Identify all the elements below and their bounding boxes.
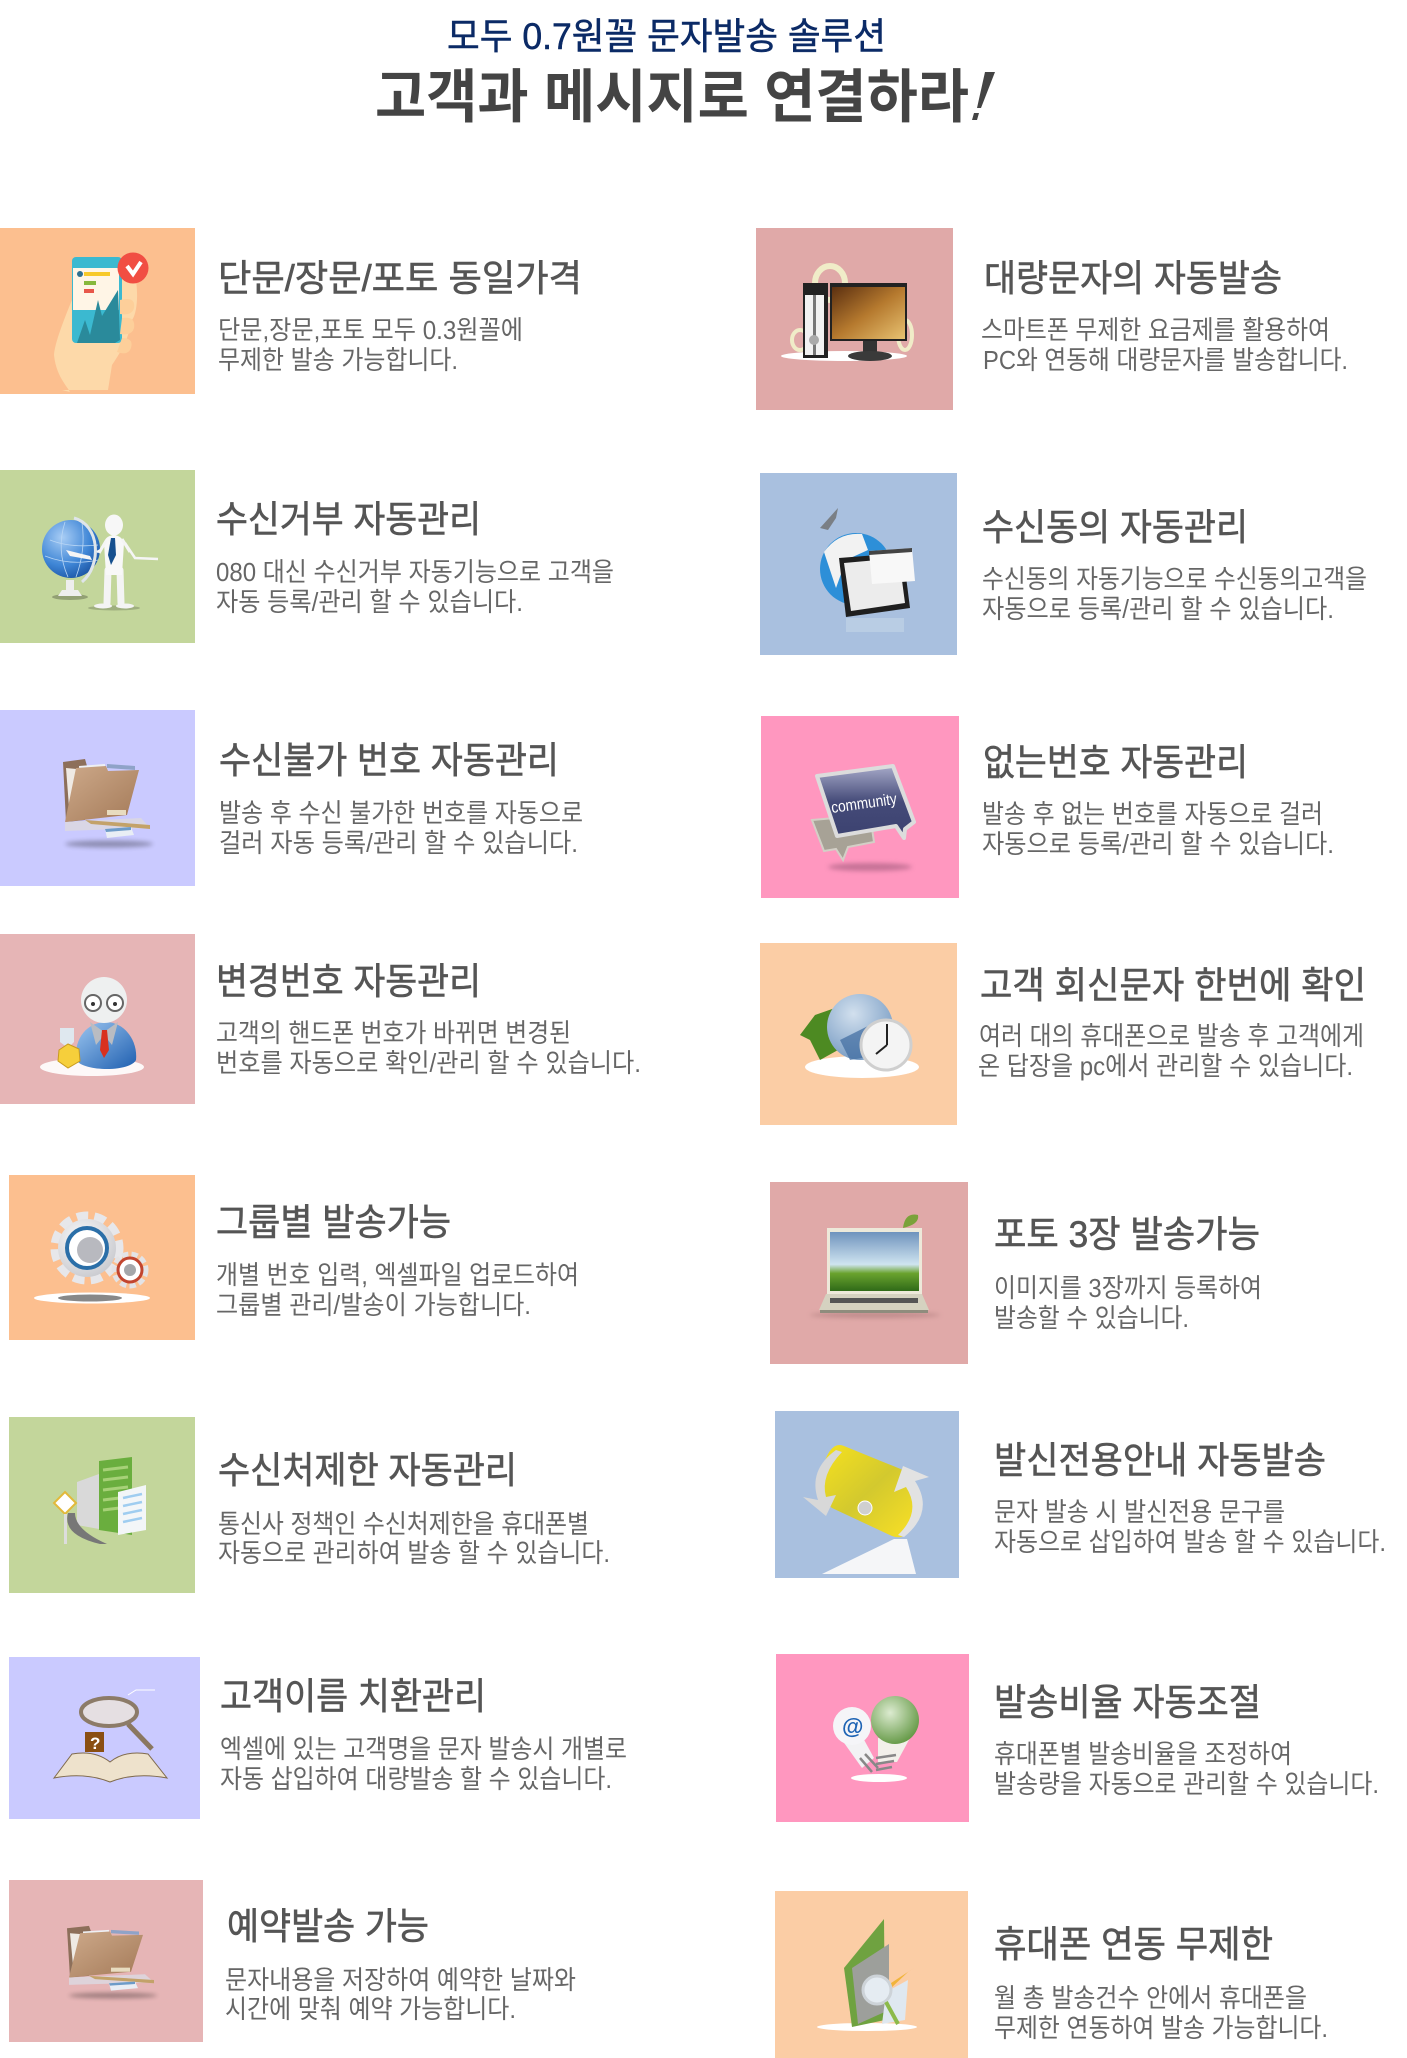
description: 시간에 맞춰 예약 가능합니다. <box>225 1994 516 2024</box>
description: 발송 후 없는 번호를 자동으로 걸러 <box>982 799 1323 829</box>
icon: community speech bubbles <box>812 766 914 871</box>
description <box>982 564 1367 624</box>
panel: 그룹별 발송가능 <box>9 1175 579 1340</box>
panel: 없는번호 자동관리 <box>761 716 1334 898</box>
description <box>216 1018 641 1078</box>
icon: folder <box>67 1926 157 1998</box>
description: 자동 삽입하여 대량발송 할 수 있습니다. <box>220 1764 612 1794</box>
description: 여러 대의 휴대폰으로 발송 후 고객에게 <box>979 1021 1364 1051</box>
description: 엑셀에 있는 고객명을 문자 발송시 개별로 <box>220 1734 627 1764</box>
description <box>225 1965 576 2024</box>
panel: 예약발송 가능 <box>9 1880 576 2042</box>
heading: 포토 3장 발송가능 <box>994 1214 1260 1255</box>
description <box>218 315 523 375</box>
description <box>219 798 583 858</box>
description: 개별 번호 입력, 엑셀파일 업로드하여 <box>216 1260 579 1290</box>
icon: hand holding phone <box>54 252 148 392</box>
description <box>216 1260 579 1320</box>
panel: 고객이름 치환관리 <box>9 1657 627 1819</box>
description: 문자내용을 저장하여 예약한 날짜와 <box>225 1965 576 1995</box>
description: 자동 등록/관리 할 수 있습니다. <box>216 587 523 617</box>
description: 걸러 자동 등록/관리 할 수 있습니다. <box>219 828 578 858</box>
description: 이미지를 3장까지 등록하여 <box>994 1273 1262 1303</box>
icon: folder <box>63 759 153 848</box>
description: 고객의 핸드폰 번호가 바뀌면 변경된 <box>216 1018 571 1048</box>
panel: 수신거부 자동관리 <box>0 470 614 643</box>
panel: 단문/장문/포토 동일가격 <box>0 228 582 394</box>
description <box>216 557 614 617</box>
panel: 대량문자의 자동발송 <box>756 228 1348 410</box>
description <box>220 1734 627 1794</box>
heading: 수신처제한 자동관리 <box>218 1450 517 1491</box>
icon: gears <box>34 1217 150 1304</box>
description <box>981 315 1348 375</box>
description: 단문,장문,포토 모두 0.3원꼴에 <box>218 315 523 345</box>
panel: 고객 회신문자 한번에 확인 <box>760 943 1366 1125</box>
description: 무제한 발송 가능합니다. <box>218 345 458 375</box>
description: 발송량을 자동으로 관리할 수 있습니다. <box>994 1769 1379 1799</box>
heading: 고객이름 치환관리 <box>220 1676 486 1717</box>
description <box>982 799 1334 859</box>
description <box>994 1983 1328 2043</box>
panel: 포토 3장 발송가능 <box>770 1182 1262 1364</box>
description: 온 답장을 pc에서 관리할 수 있습니다. <box>978 1051 1353 1081</box>
icon: person with globe <box>42 514 158 610</box>
heading: 수신거부 자동관리 <box>216 499 481 540</box>
icon: light bulbs <box>833 1696 919 1782</box>
description: 문자 발송 시 발신전용 문구를 <box>994 1497 1285 1527</box>
description <box>978 1021 1364 1081</box>
heading: 단문/장문/포토 동일가격 <box>218 258 582 299</box>
icon: buildings and road sign <box>54 1457 146 1544</box>
heading: 발송비율 자동조절 <box>994 1682 1261 1723</box>
description: 발송할 수 있습니다. <box>994 1303 1189 1333</box>
heading: 예약발송 가능 <box>227 1906 429 1947</box>
description: 스마트폰 무제한 요금제를 활용하여 <box>981 315 1330 345</box>
panel: 변경번호 자동관리 <box>0 934 641 1104</box>
heading: 휴대폰 연동 무제한 <box>994 1924 1273 1965</box>
heading: 발신전용안내 자동발송 <box>994 1440 1326 1481</box>
description: 휴대폰별 발송비율을 조정하여 <box>994 1739 1292 1769</box>
icon: community speech bubbles: community <box>830 791 898 817</box>
panel: 발신전용안내 자동발송 <box>775 1411 1386 1578</box>
heading: 수신동의 자동관리 <box>982 507 1248 548</box>
description: PC와 연동해 대량문자를 발송합니다. <box>983 345 1348 375</box>
description <box>994 1739 1379 1799</box>
heading: 대량문자의 자동발송 <box>984 258 1282 299</box>
icon: magnifier and book <box>54 1690 167 1782</box>
description: 월 총 발송건수 안에서 휴대폰을 <box>994 1983 1307 2013</box>
description: 그룹별 관리/발송이 가능합니다. <box>216 1290 531 1320</box>
title: subtitle: 모두 0.7원꼴 문자발송 솔루션 <box>447 16 886 57</box>
icon: folders with magnifier <box>817 1919 917 2031</box>
description <box>994 1497 1386 1557</box>
heading: 수신불가 번호 자동관리 <box>219 740 559 781</box>
description: 수신동의 자동기능으로 수신동의고객을 <box>982 564 1367 594</box>
panel: 발송비율 자동조절 <box>776 1654 1379 1822</box>
title: main heading: 고객과 메시지로 연결하라 <box>375 65 969 130</box>
heading: 그룹별 발송가능 <box>216 1202 451 1243</box>
icon: globe and clock <box>800 994 919 1078</box>
panel: 수신불가 번호 자동관리 <box>0 710 583 886</box>
description: 무제한 연동하여 발송 가능합니다. <box>994 2013 1328 2043</box>
icon: envelope with arrows <box>803 1445 929 1574</box>
panel: 수신동의 자동관리 <box>760 473 1367 655</box>
description: 080 대신 수신거부 자동기능으로 고객을 <box>216 557 614 587</box>
panel: 휴대폰 연동 무제한 <box>775 1891 1328 2058</box>
icon: globe and tablet <box>820 508 915 632</box>
description <box>218 1509 610 1568</box>
icon: person with medal <box>40 977 144 1076</box>
icon: laptop <box>810 1215 940 1318</box>
description: 자동으로 등록/관리 할 수 있습니다. <box>982 594 1334 624</box>
heading: 없는번호 자동관리 <box>983 742 1248 783</box>
description: 발송 후 수신 불가한 번호를 자동으로 <box>219 798 583 828</box>
heading: 변경번호 자동관리 <box>216 961 481 1002</box>
heading: 고객 회신문자 한번에 확인 <box>980 965 1366 1006</box>
icon: magnifier and book: ? <box>90 1734 100 1753</box>
description: 통신사 정책인 수신처제한을 휴대폰별 <box>218 1509 589 1539</box>
icon: light bulbs: @ <box>842 1714 863 1739</box>
description: 번호를 자동으로 확인/관리 할 수 있습니다. <box>216 1048 641 1078</box>
icon: desktop computer <box>781 266 912 361</box>
description: 자동으로 관리하여 발송 할 수 있습니다. <box>218 1538 610 1568</box>
description <box>994 1273 1262 1333</box>
panel: 수신처제한 자동관리 <box>9 1417 610 1593</box>
description: 자동으로 등록/관리 할 수 있습니다. <box>982 829 1334 859</box>
